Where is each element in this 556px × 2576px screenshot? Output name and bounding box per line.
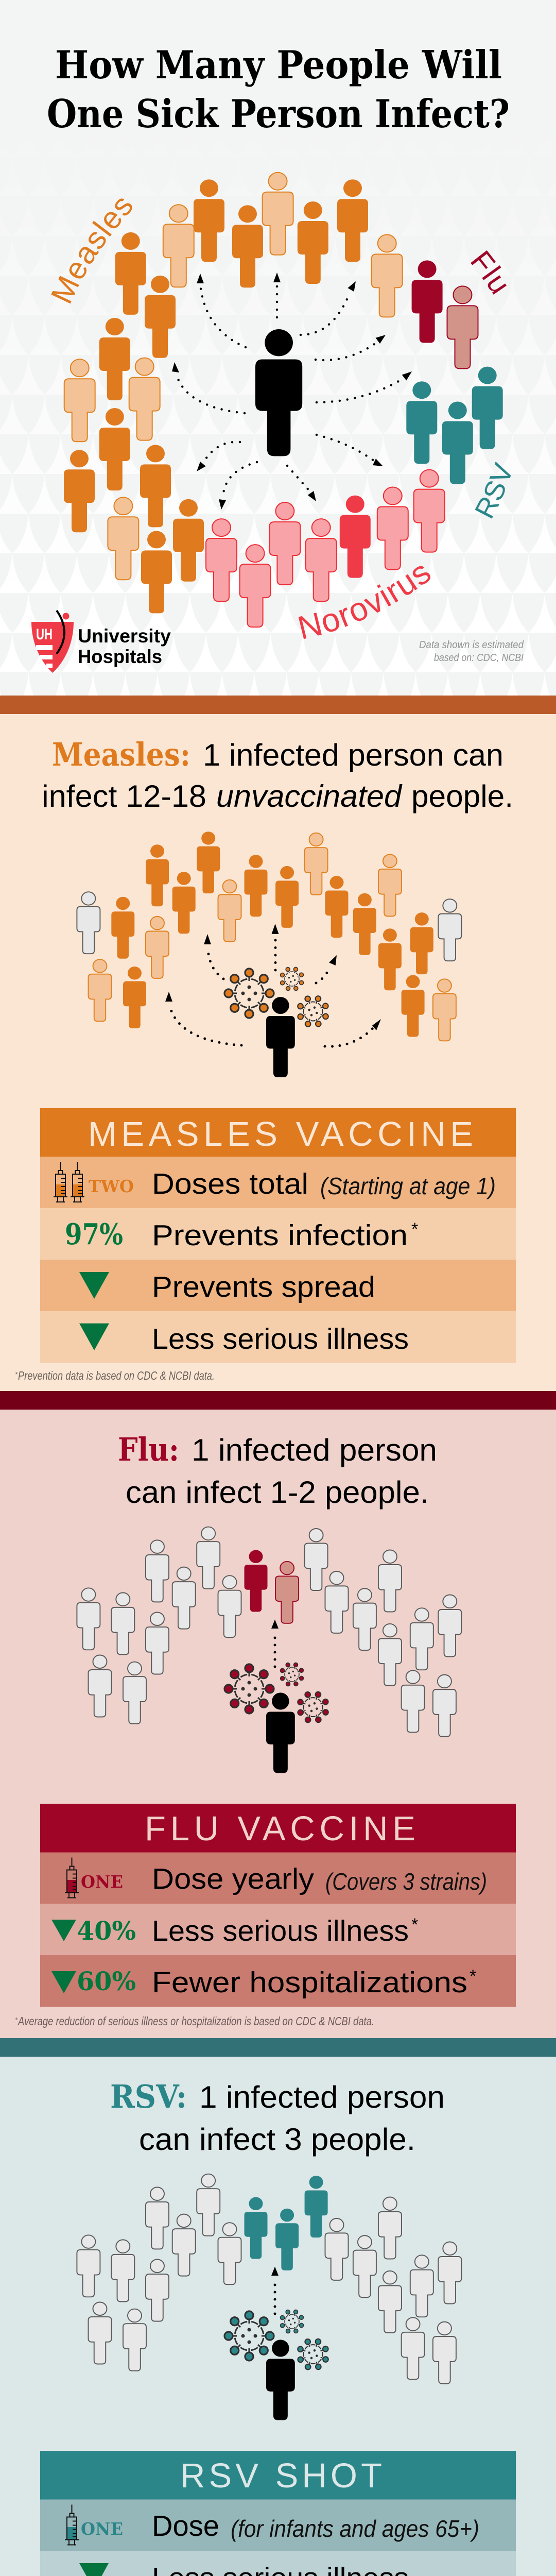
row: two doses: TWO	[89, 1176, 134, 1196]
label: Flu: Flu	[471, 250, 507, 295]
measles people group	[64, 173, 403, 613]
logo: University Hospitals: Hospitals	[78, 646, 162, 667]
logo: University Hospitals: University	[78, 625, 171, 647]
row: one dose: ONE	[81, 2519, 123, 2539]
flu heading: can infect 1-2 people.	[126, 1475, 429, 1510]
measles heading	[42, 736, 513, 814]
flu footnote: *	[15, 2016, 18, 2024]
measles people illustration	[77, 832, 461, 1041]
table title: RSV SHOT	[180, 2456, 382, 2495]
data source note	[419, 639, 524, 664]
panel: measles	[0, 696, 556, 1391]
rsv people illustration	[77, 2174, 461, 2384]
measles footnote: Prevention data is based on CDC & NCBI data.	[18, 1369, 215, 1382]
row: fewer hospitalizations: 60%	[77, 1966, 136, 1996]
flu virus particles	[224, 1658, 334, 1728]
row: less serious illness: Less serious illness	[152, 1914, 409, 1947]
row: prevents infection: Prevents infection	[152, 1219, 408, 1252]
rsv spread arrow	[271, 2267, 279, 2314]
row: fewer hospitalizations	[51, 1966, 476, 1999]
rsv heading	[110, 2078, 445, 2157]
row: less serious illness: Less serious illness	[152, 1323, 409, 1355]
row: prevents infection: 97%	[65, 1217, 123, 1251]
flu people illustration	[77, 1527, 461, 1737]
flu spread arrow	[271, 1620, 279, 1667]
measles footnote: *	[15, 1370, 18, 1378]
label: Measles: Measles	[51, 198, 132, 304]
measles sick person	[266, 997, 295, 1077]
row: two doses: Doses total	[152, 1167, 308, 1200]
data source note: based on: CDC, NCBI	[434, 652, 524, 664]
row: two doses	[89, 1167, 496, 1200]
flu people group	[412, 260, 478, 368]
row: one dose yearly: (Covers 3 strains)	[325, 1868, 487, 1895]
central sick person	[255, 329, 302, 456]
icon: syringe	[65, 1858, 79, 1898]
rsv heading: RSV:	[110, 2078, 187, 2115]
data source note: Data shown is estimated	[419, 639, 524, 651]
flu heading	[118, 1431, 437, 1510]
icon: syringe	[65, 2505, 79, 2545]
label: RSV: RSV	[475, 462, 511, 519]
row: fewer hospitalizations: Fewer hospitalizations	[152, 1966, 467, 1999]
title: One Sick Person Infect?	[47, 91, 510, 137]
title	[47, 42, 510, 137]
label: Norovirus: Norovirus	[299, 566, 430, 639]
row: less serious illness	[51, 1914, 418, 1947]
infection arrows	[172, 273, 412, 510]
row: two doses: (Starting at age 1)	[320, 1173, 496, 1199]
row: one dose yearly: ONE	[81, 1872, 123, 1892]
measles heading: Measles:	[52, 736, 190, 773]
flu heading: Flu:	[118, 1431, 179, 1468]
flu footnote: Average reduction of serious illness or hospitalization is based on CDC & NCBI data.	[17, 2014, 374, 2028]
rsv people group	[406, 367, 503, 484]
row: less serious illness: 40%	[77, 1916, 136, 1946]
rsv heading: 1 infected person	[199, 2080, 445, 2114]
row: one dose yearly	[81, 1862, 487, 1895]
panel: rsv	[0, 2038, 556, 2576]
row: one dose yearly: Dose yearly	[152, 1862, 315, 1895]
table title: MEASLES VACCINE	[88, 1115, 473, 1154]
measles spread arrows	[165, 924, 381, 1046]
row: one dose	[81, 2510, 479, 2543]
row: less serious illness: *	[411, 1915, 418, 1935]
measles vaccine table	[40, 1108, 516, 1363]
table title: FLU VACCINE	[145, 1809, 415, 1848]
rsv shot table	[40, 2451, 516, 2576]
rsv sick person	[266, 2340, 295, 2420]
measles heading: unvaccinated	[216, 779, 403, 814]
row: one dose: Dose	[152, 2510, 219, 2543]
icon: two syringes	[54, 1162, 84, 1202]
panel: hero	[0, 0, 556, 696]
row: prevents spread: Prevents spread	[152, 1270, 375, 1303]
rsv virus particles	[224, 2306, 334, 2376]
row: fewer hospitalizations: *	[470, 1967, 476, 1986]
scale pattern background	[0, 0, 556, 696]
measles heading: people.	[411, 779, 513, 814]
norovirus people group	[206, 470, 445, 627]
rsv heading: can infect 3 people.	[139, 2122, 415, 2157]
measles heading: infect 12-18	[42, 779, 206, 814]
measles heading: 1 infected person can	[203, 738, 503, 772]
flu heading: 1 infected person	[192, 1433, 437, 1467]
row: prevents infection	[65, 1217, 418, 1252]
logo: University Hospitals	[31, 611, 171, 673]
row: prevents infection: *	[411, 1219, 418, 1239]
measles virus particles	[224, 963, 334, 1032]
flu vaccine table	[40, 1804, 516, 2007]
title: How Many People Will	[55, 42, 502, 88]
logo: University Hospitals: UH	[36, 626, 53, 643]
flu sick person	[266, 1692, 295, 1773]
panel: flu	[0, 1391, 556, 2038]
row: one dose: (for infants and ages 65+)	[231, 2515, 479, 2542]
